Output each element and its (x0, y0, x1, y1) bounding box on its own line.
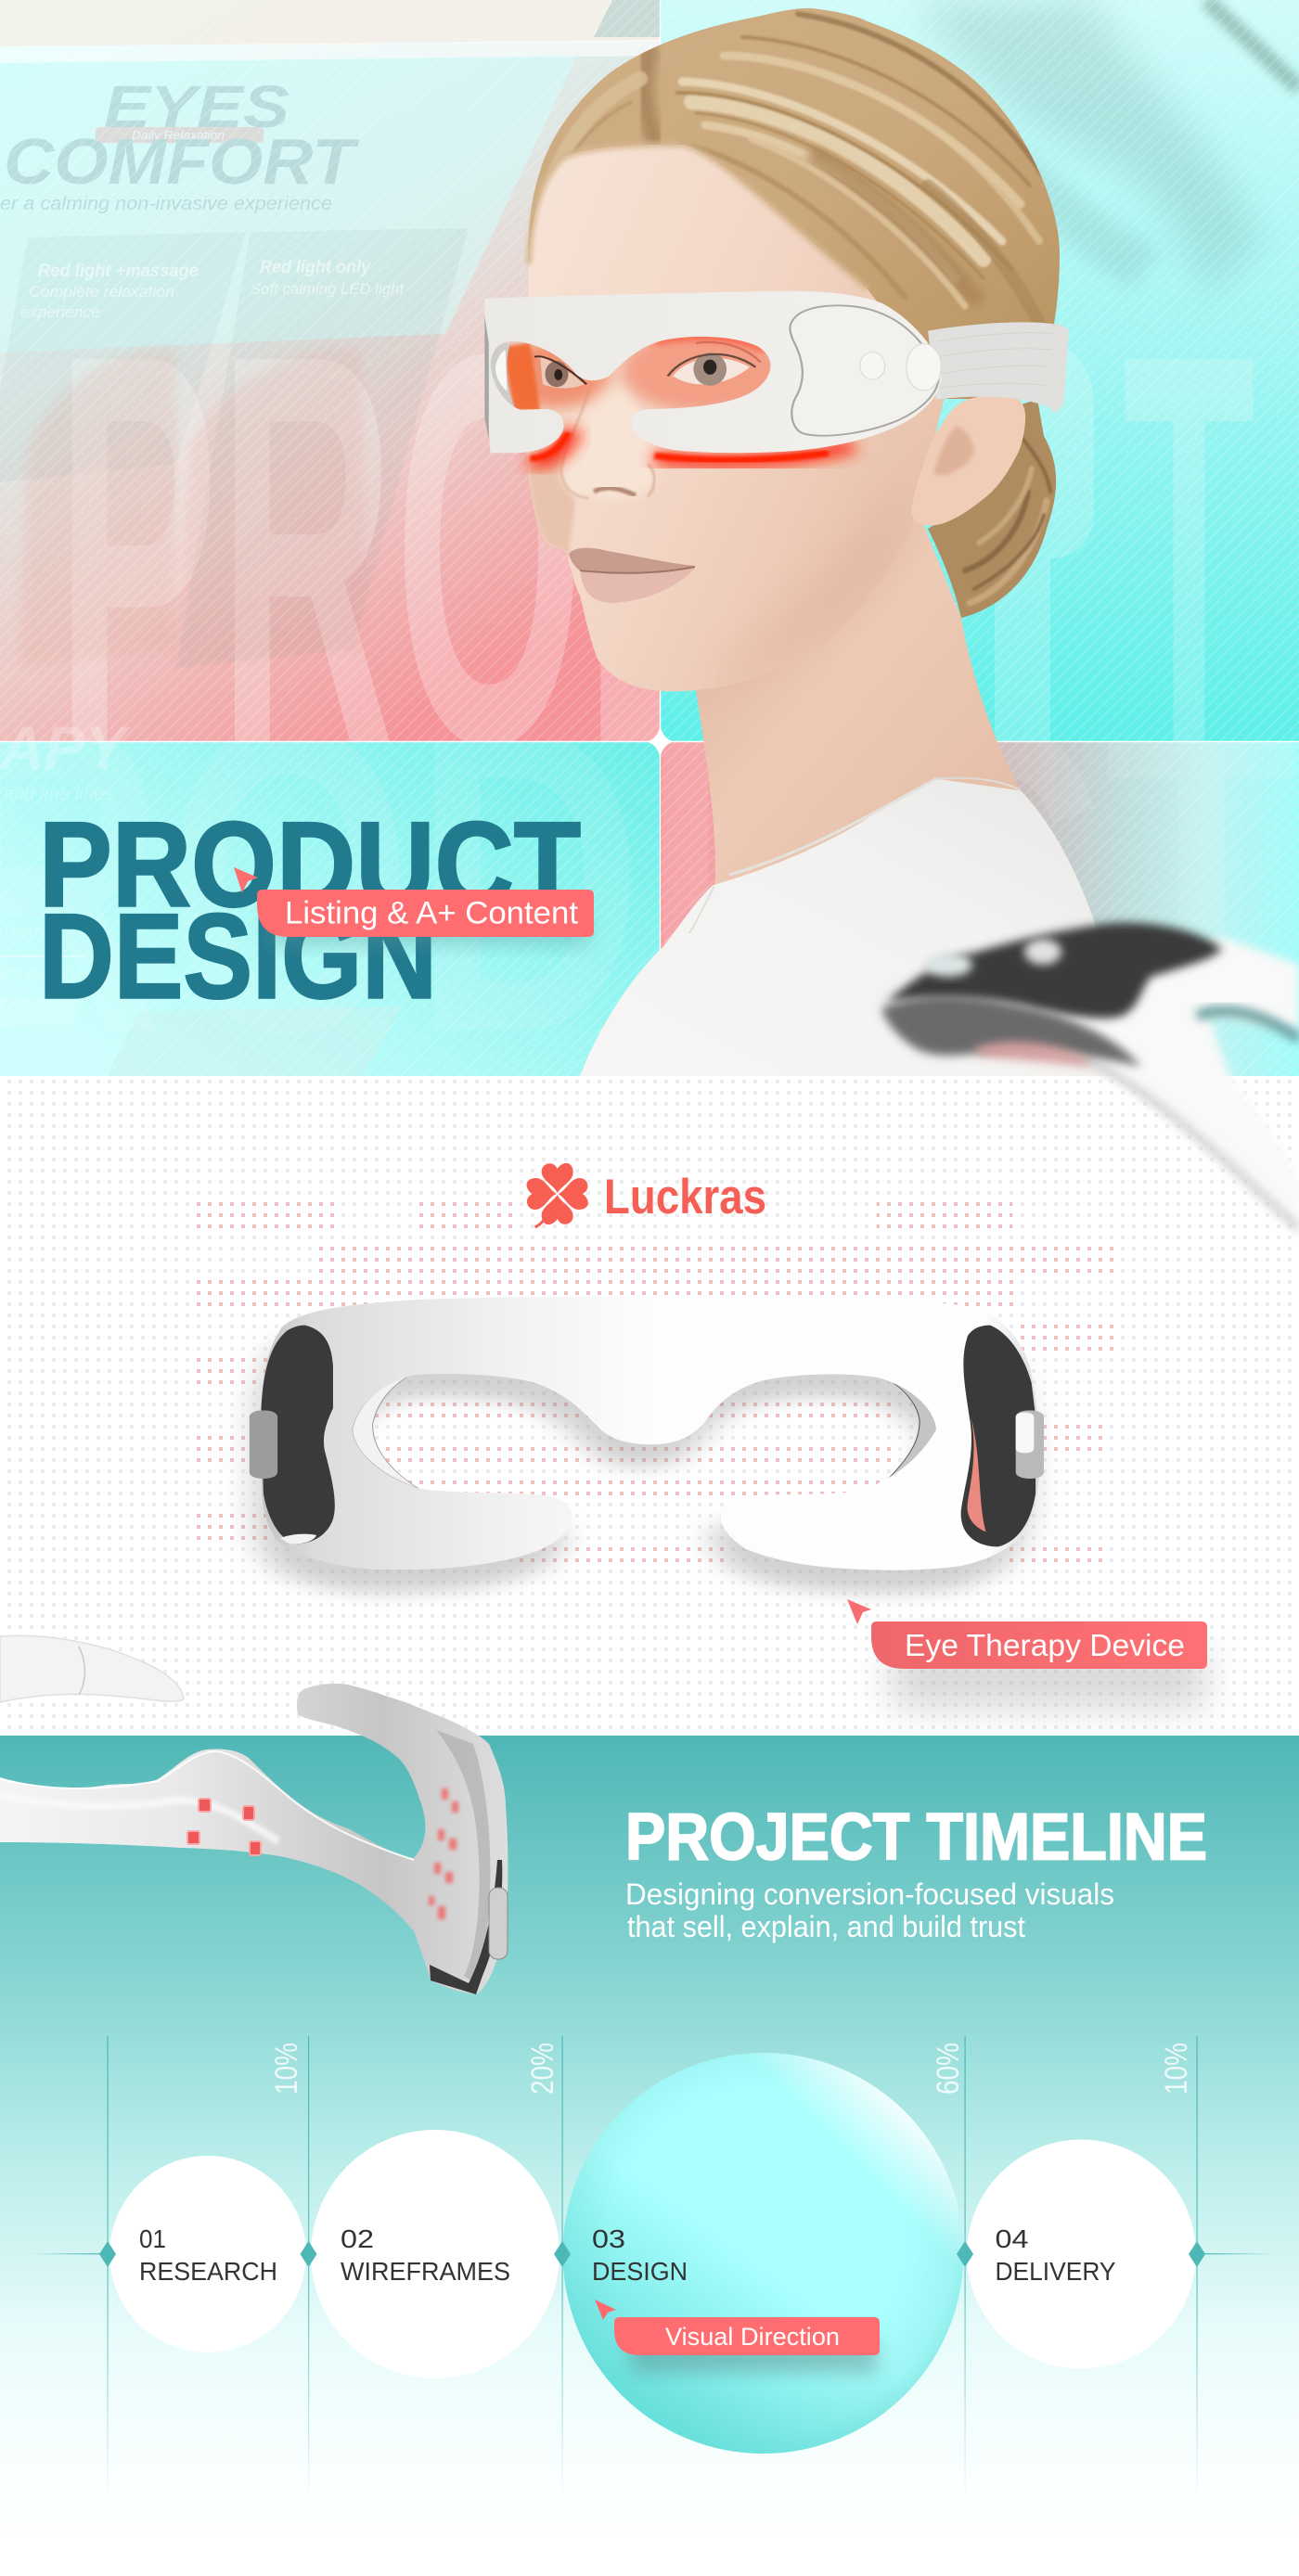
white device body (1046, 937, 1299, 1226)
wordmark: Luckras (604, 1170, 766, 1224)
arc shadow (1058, 1050, 1299, 1229)
step label: 04 delivery: DELIVERY (995, 2257, 1116, 2286)
face (527, 145, 946, 691)
circle: 03 design (562, 2053, 963, 2454)
teal lens edge (1197, 1011, 1299, 1039)
faint background content: eyes comfort layout: Daily Relaxation (132, 128, 225, 142)
dark inner wall (436, 1730, 490, 1985)
teal gradient background (0, 1736, 1299, 2576)
timeline end stubs (29, 2253, 1276, 2254)
subheading: that sell, explain, and build trust (627, 1910, 1025, 1943)
dotted background (0, 1076, 1299, 1737)
step label: 04 delivery: 04 (995, 2224, 1028, 2253)
silver knob (489, 1888, 508, 1959)
right panel red reflection (968, 1416, 986, 1532)
eye device on face (484, 291, 942, 453)
percentage labels: 10% (269, 2043, 304, 2095)
faint background content: feature cards: Complete relaxation (29, 283, 174, 301)
hair bun (928, 399, 1056, 618)
heading: project timeline: PROJECT TIMELINE (625, 1801, 1207, 1874)
shirt (580, 778, 1143, 1076)
red light glow (501, 285, 854, 462)
faint background text: therapy fragments: Tired e (2, 923, 51, 941)
faint background content: eyes comfort layout: EYES (104, 73, 289, 140)
left panel highlight (280, 1534, 316, 1544)
pink dot bands (197, 1202, 1115, 1562)
dark panel (886, 923, 1222, 1019)
percentage labels: 10% (1159, 2043, 1194, 2095)
hero banner (0, 0, 1299, 1122)
step label: 03 design: 03 (592, 2224, 625, 2253)
step label: 03 design: DESIGN (592, 2257, 688, 2286)
step label: 04 delivery (995, 2224, 1116, 2286)
main eye therapy device (250, 1297, 1044, 1594)
side led lights (429, 1788, 458, 1919)
tag (614, 2317, 880, 2355)
callout: visual direction (595, 2300, 880, 2373)
ear (911, 394, 1025, 525)
side device fragment (0, 1635, 184, 1702)
timeline diamonds (99, 2241, 1205, 2267)
hairline softening (529, 145, 868, 289)
hero panel: bottom left cyan gradient (0, 742, 660, 1076)
timeline vertical lines (108, 2036, 1198, 2505)
step label: 02 wireframes: WIREFRAMES (341, 2257, 510, 2286)
white body (261, 1297, 1040, 1570)
faint background portraits (19, 348, 367, 668)
left side button (250, 1410, 277, 1479)
sparkle at panel junction (647, 725, 674, 758)
strap (928, 322, 1069, 413)
step label: 01 research (139, 2224, 277, 2286)
woman device and details (484, 285, 1143, 1076)
faint background content: eyes comfort layout: er a calming non-invasive experience (0, 194, 332, 214)
step label: 03 design (592, 2224, 688, 2286)
right dark panel (961, 1326, 1035, 1546)
percentage labels (269, 2043, 1194, 2095)
tag (871, 1621, 1207, 1669)
icon: clover (527, 1163, 588, 1227)
section: project timeline (0, 1736, 1299, 2576)
hair (529, 8, 1060, 399)
faint background content: eyes comfort layout (0, 73, 360, 214)
tag (257, 890, 594, 937)
pink reflection (974, 1042, 1090, 1067)
dark lower rim (881, 997, 1141, 1067)
woman head (527, 8, 1060, 891)
neck therapy device (0, 1684, 508, 1994)
step label: 02 wireframes: 02 (341, 2224, 374, 2253)
light spot on left (924, 953, 972, 977)
faint background content: feature cards: Soft calming LED light (251, 280, 405, 298)
subheading (625, 1878, 1114, 1943)
left dark panel (261, 1326, 335, 1544)
faint background text: therapy fragments: APY (0, 713, 131, 782)
title: product design: DESIGN (39, 889, 437, 1024)
section: product device (0, 1076, 1299, 1737)
step label: 02 wireframes (341, 2224, 510, 2286)
rim highlight (0, 1751, 414, 1860)
neck (696, 501, 1021, 891)
hero panel: top left pink gradient (0, 0, 660, 741)
subheading: Designing conversion-focused visuals (625, 1878, 1114, 1911)
background ghost letters right side (995, 349, 1253, 741)
device shadow (252, 1320, 1032, 1594)
title: product design (39, 796, 581, 1024)
faint background content: feature cards: experience (20, 303, 100, 321)
title: product design: PRODUCT (39, 796, 581, 931)
faint background text: therapy fragments (0, 713, 131, 982)
tag text: Eye Therapy Device (905, 1628, 1185, 1662)
cursor arrow (234, 867, 258, 892)
percentage labels: 60% (931, 2043, 966, 2095)
step label: 01 research: 01 (139, 2224, 166, 2253)
faint background content: feature cards (20, 258, 405, 321)
step label: 01 research: RESEARCH (139, 2257, 277, 2286)
faint background content: feature cards: Red light only (260, 258, 371, 277)
panel divider lines (0, 0, 1299, 950)
right side button (1016, 1410, 1044, 1479)
dark edge stripe (430, 1860, 502, 1994)
led lights (187, 1799, 261, 1855)
chrome rims (352, 1375, 940, 1489)
far cheek (527, 445, 575, 554)
faint background content: feature cards: Red light +massage (38, 262, 199, 281)
logo: luckras (527, 1163, 766, 1227)
lips (569, 548, 695, 603)
light spot on button (1024, 939, 1061, 965)
faint background content: eyes comfort layout: COMFORT (4, 125, 360, 198)
hero panel: bottom right pink to cyan gradient (661, 742, 1299, 1076)
circle: 01 research (109, 2156, 306, 2352)
tag text: Listing & A+ Content (285, 896, 579, 931)
nose (561, 383, 655, 498)
eyes (491, 342, 761, 412)
inner highlight (0, 1795, 278, 1841)
jaw shading (765, 549, 868, 651)
percentage labels: 20% (525, 2043, 560, 2095)
circle: 02 wireframes (311, 2130, 559, 2378)
hero panel: top right cyan gradient (661, 0, 1299, 741)
circle: 04 delivery (967, 2139, 1196, 2369)
tag text: Visual Direction (665, 2323, 840, 2351)
cursor arrow (847, 1599, 871, 1624)
device shell (0, 1684, 508, 1994)
faint background text: therapy fragments: w's feel (0, 965, 53, 982)
diagonal hatch texture (0, 0, 1299, 1076)
faint background text: therapy fragments: and fine lines (4, 784, 113, 804)
callout: listing and a+ content (234, 867, 594, 945)
callout: eye therapy device (847, 1599, 1207, 1707)
cursor arrow (595, 2300, 616, 2320)
blurred foreground device (881, 923, 1299, 1229)
